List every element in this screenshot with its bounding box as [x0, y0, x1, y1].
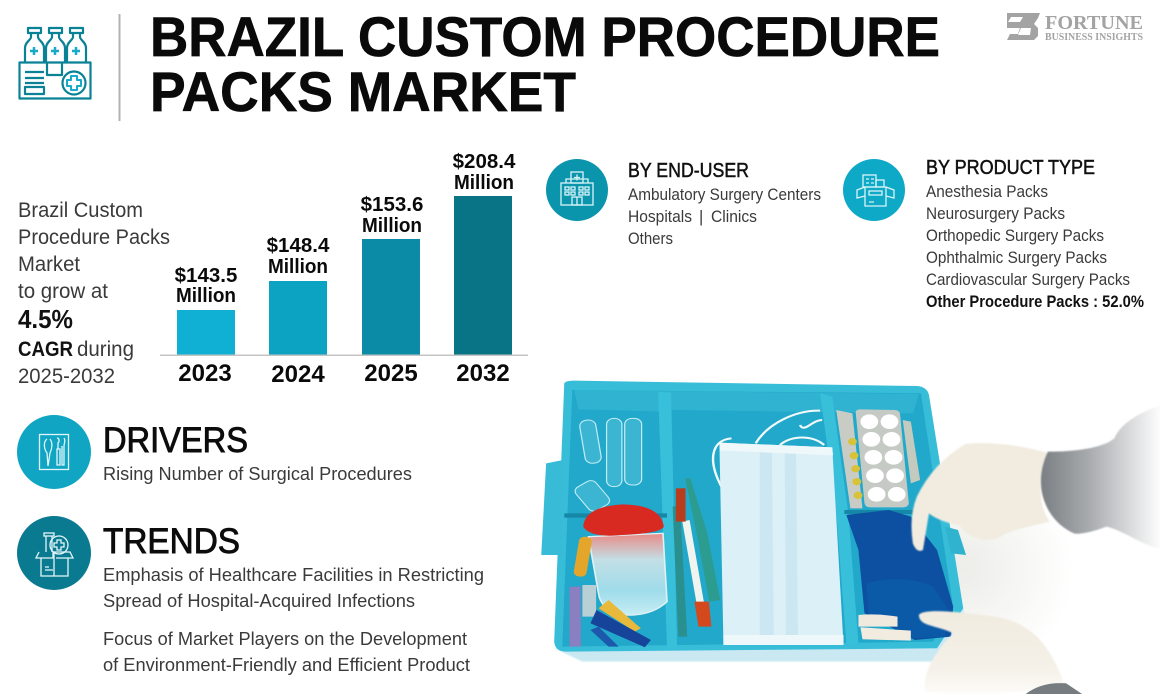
text block: trends: Emphasis of Healthcare Facilities in Restricting [103, 564, 484, 585]
icon: surgical instruments [17, 415, 91, 489]
bar chart: market size by year: Million [362, 214, 422, 237]
photo: custom procedure pack in blue tray with gloved hands [541, 381, 1160, 694]
text block: market growth summary: Brazil Custom [18, 199, 143, 222]
icon: product pack box [843, 159, 905, 221]
text block: market growth summary: Procedure Packs [18, 226, 170, 249]
logo: Fortune Business Insights [1007, 12, 1143, 43]
title: BRAZIL CUSTOM PROCEDURE [150, 5, 940, 68]
text block: market growth summary [18, 199, 170, 388]
text block: drivers [103, 420, 412, 484]
logo: Fortune Business Insights: FORTUNE [1045, 12, 1143, 34]
text block: by product type: Cardiovascular Surgery Packs [926, 271, 1130, 289]
text block: market growth summary: to grow at [18, 280, 108, 303]
text block: by end-user: BY END-USER [628, 160, 749, 182]
header divider [118, 14, 120, 121]
text block: trends: Spread of Hospital-Acquired Infections [103, 590, 415, 611]
bar chart: market size by year [160, 150, 528, 388]
text block: trends: TRENDS [103, 521, 240, 561]
logo: Fortune Business Insights: BUSINESS INSIGHTS [1045, 32, 1143, 43]
bar chart: market size by year: $208.4 [453, 150, 516, 173]
text block: market growth summary: 2025-2032 [18, 365, 115, 388]
text block: by end-user: Hospitals [628, 208, 692, 226]
icon: medicine bottles and kit [20, 28, 90, 98]
title: PACKS MARKET [150, 60, 576, 123]
text block: by end-user: Others [628, 230, 673, 248]
text block: market growth summary: CAGR [18, 338, 73, 361]
text block: by end-user [628, 160, 821, 248]
bar chart: market size by year: 2032 [456, 360, 510, 387]
bar chart: market size by year: $153.6 [361, 193, 423, 216]
text block: by end-user: Clinics [711, 208, 757, 226]
bar chart: market size by year: 2024 [271, 361, 325, 388]
text block: by product type: BY PRODUCT TYPE [926, 157, 1095, 179]
text block: by product type: Anesthesia Packs [926, 183, 1048, 201]
title [150, 5, 940, 123]
text block: market growth summary: during [77, 338, 134, 361]
bar chart: market size by year: 2023 [178, 360, 232, 387]
text block: by end-user: | [699, 208, 703, 226]
bar chart: market size by year: $143.5 [175, 264, 237, 287]
text block: market growth summary: Market [18, 253, 80, 276]
text block: drivers: DRIVERS [103, 420, 248, 460]
text block: by product type: Ophthalmic Surgery Packs [926, 249, 1107, 267]
text block: trends [103, 521, 484, 675]
bar chart: market size by year: Million [176, 284, 236, 307]
text block: by product type: Orthopedic Surgery Packs [926, 227, 1104, 245]
bar chart: market size by year: Million [454, 171, 514, 194]
icon: medical box [17, 516, 91, 590]
text block: trends: of Environment-Friendly and Efficient Product [103, 654, 470, 675]
bar chart: market size by year: $148.4 [267, 234, 330, 257]
text block: by product type [926, 157, 1144, 311]
text block: trends: Focus of Market Players on the Development [103, 628, 467, 649]
bar chart: market size by year: Million [268, 255, 328, 278]
text block: by product type: Neurosurgery Packs [926, 205, 1065, 223]
icon: hospital building [546, 159, 608, 221]
bar chart: market size by year: 2025 [364, 360, 418, 387]
text block: market growth summary: 4.5% [18, 304, 73, 334]
text block: drivers: Rising Number of Surgical Procedures [103, 463, 412, 484]
text block: by end-user: Ambulatory Surgery Centers [628, 186, 821, 204]
